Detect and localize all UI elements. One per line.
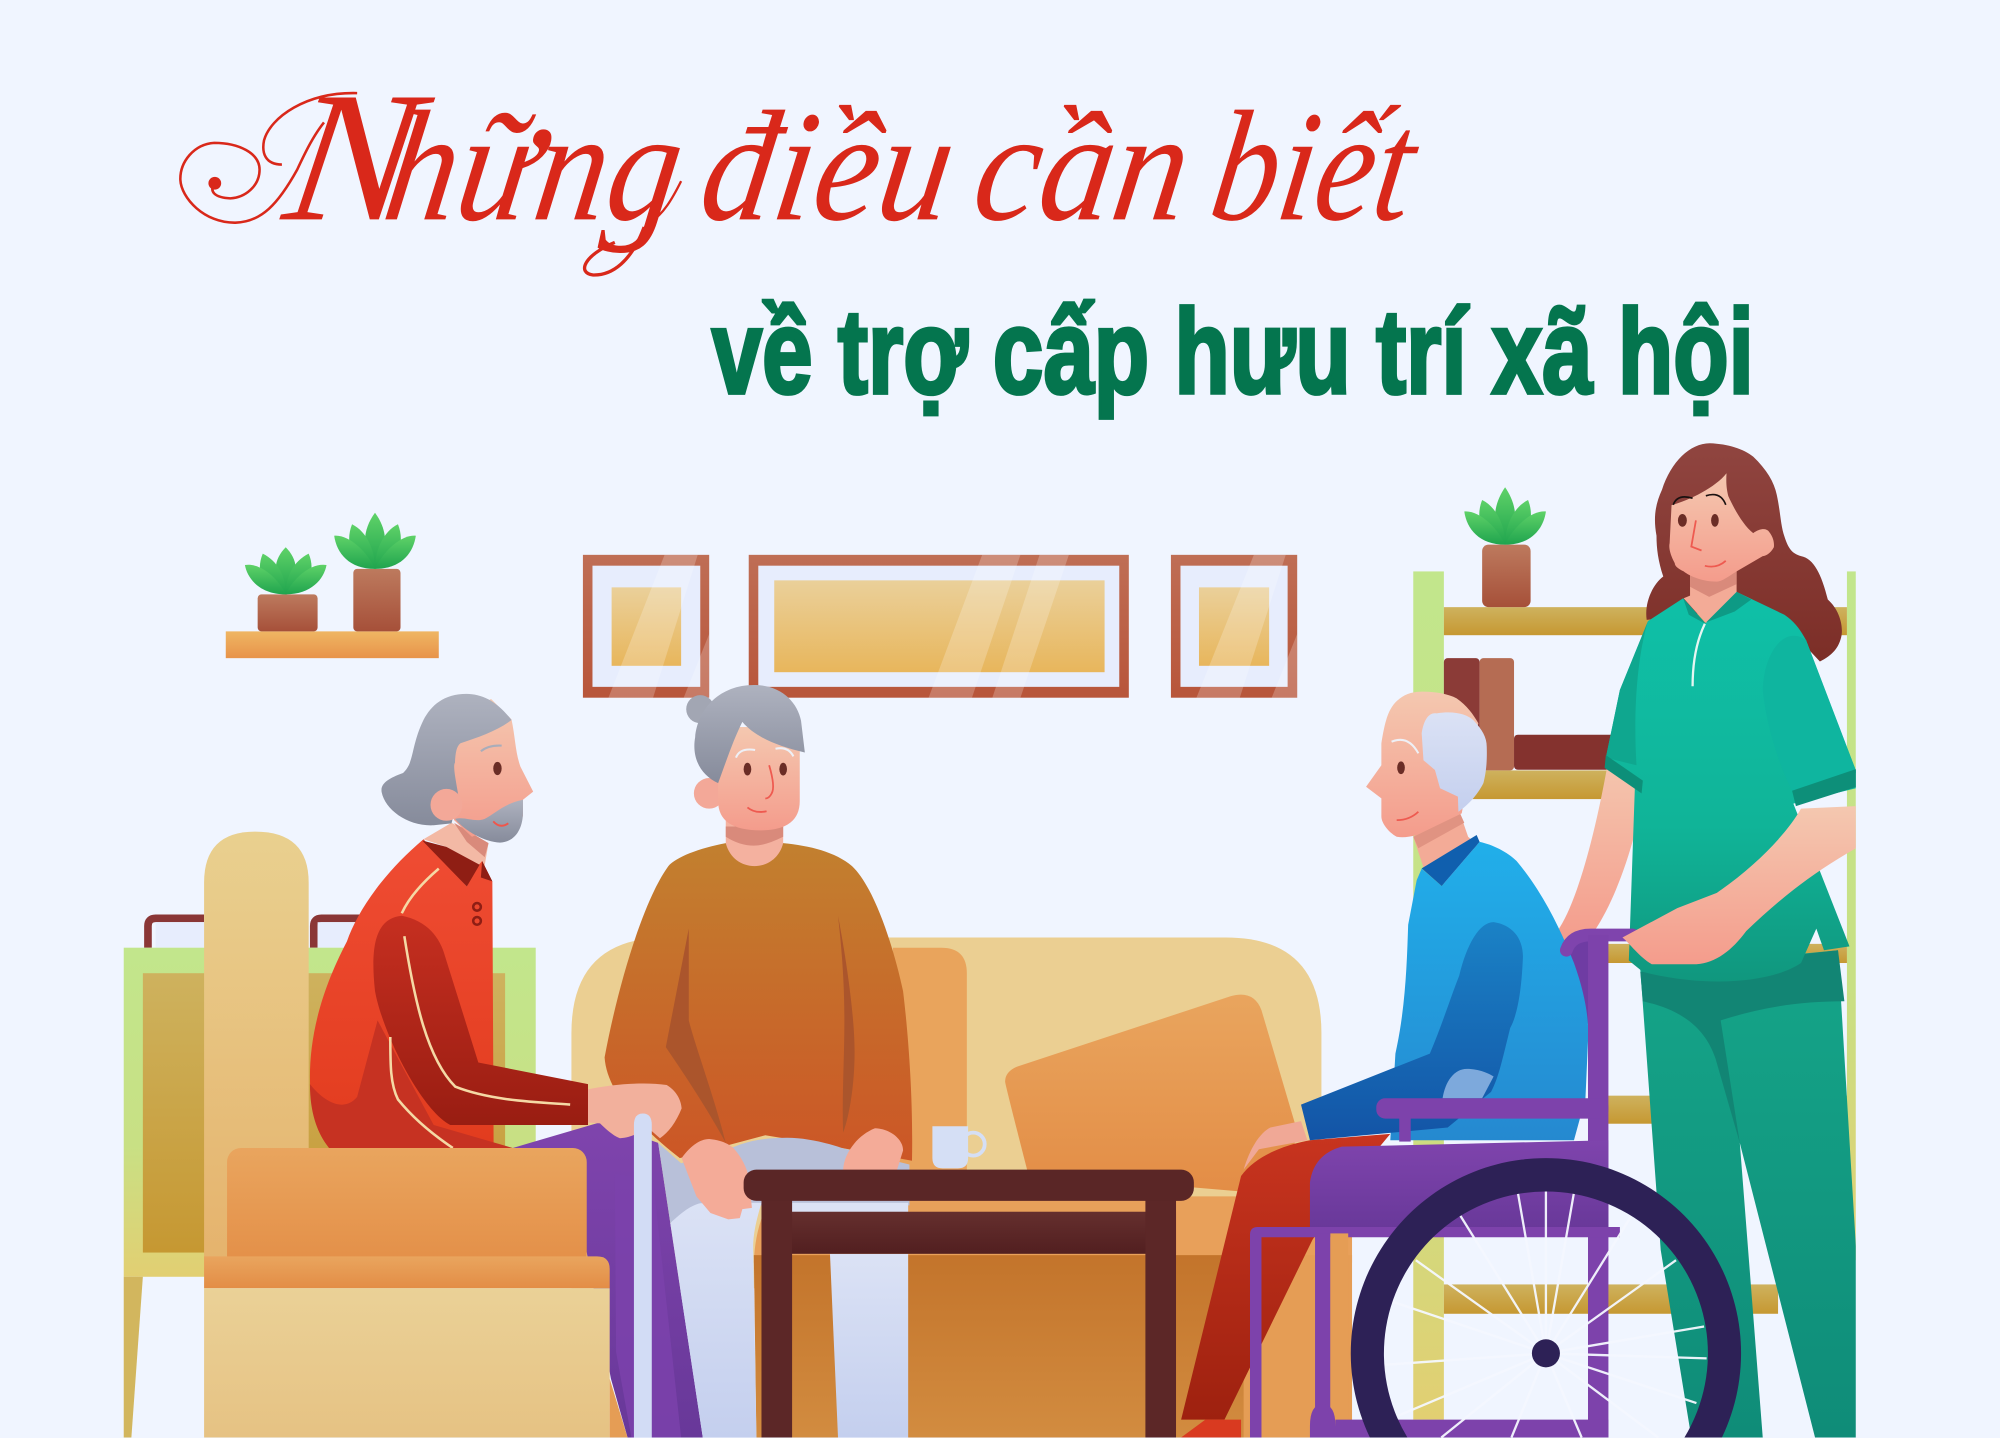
sweater bbox=[1390, 842, 1588, 1140]
eye bbox=[1397, 761, 1405, 774]
hair bbox=[1422, 712, 1487, 812]
face bbox=[718, 727, 800, 830]
eyes bbox=[1678, 514, 1687, 527]
top frames bbox=[148, 918, 360, 948]
brows bbox=[1673, 495, 1726, 505]
piping bbox=[390, 869, 570, 1148]
front roll bbox=[204, 1256, 610, 1288]
neck shadow bbox=[1690, 568, 1737, 597]
buttons bbox=[473, 903, 481, 925]
left leg bbox=[670, 1203, 761, 1437]
brows bbox=[736, 748, 793, 758]
man's hand on cane bbox=[588, 1083, 682, 1138]
cabinet body bbox=[124, 948, 536, 1277]
elbow patch bbox=[1443, 1069, 1494, 1098]
bun bbox=[686, 695, 714, 723]
purple trouser highlight bbox=[615, 1173, 681, 1437]
pot right bbox=[353, 569, 401, 631]
arm bbox=[1301, 922, 1523, 1140]
collar bbox=[422, 841, 492, 886]
title text: điều bbox=[691, 79, 966, 254]
left cabinet bbox=[124, 918, 536, 1437]
tunic bbox=[1606, 592, 1856, 981]
neck bbox=[1413, 813, 1480, 867]
picture frame right bbox=[1171, 555, 1297, 698]
footrest rail bbox=[1310, 1404, 1608, 1437]
sofa seat bbox=[754, 1196, 1352, 1263]
sweater bbox=[605, 843, 912, 1161]
mouth bbox=[747, 807, 767, 812]
man in wheelchair bbox=[1181, 692, 1588, 1437]
left arm bbox=[1557, 753, 1645, 944]
face bbox=[1669, 473, 1774, 582]
frame rails bbox=[1250, 1227, 1620, 1437]
right bookcase bbox=[1413, 487, 1856, 1420]
plant on shelf bbox=[1464, 487, 1546, 545]
picture frame left bbox=[583, 555, 709, 698]
face bbox=[440, 699, 533, 837]
neck bbox=[1684, 568, 1737, 623]
shelves bbox=[1444, 607, 1847, 635]
brow bbox=[1392, 740, 1418, 753]
wheelchair bbox=[1250, 935, 1741, 1437]
hair bbox=[381, 694, 511, 825]
shelf board bbox=[226, 631, 439, 658]
nurse body bbox=[1557, 443, 1856, 1437]
wheelchair backrest bbox=[1564, 935, 1591, 1033]
armchair base bbox=[204, 1288, 610, 1437]
purple trousers bbox=[513, 1122, 703, 1437]
trousers bbox=[1640, 950, 1856, 1437]
push handle bbox=[1566, 935, 1633, 950]
title text: biết bbox=[1201, 79, 1430, 254]
armchair back bbox=[204, 832, 309, 1276]
decorative swash of the capital N bbox=[180, 93, 681, 275]
sleeve shade right bbox=[1763, 636, 1856, 791]
pot on shelf bbox=[1482, 545, 1531, 607]
folds bbox=[666, 929, 726, 1143]
right hand bbox=[843, 1128, 903, 1171]
beard bbox=[455, 800, 523, 843]
smile bbox=[493, 821, 508, 826]
tunic zip bbox=[1693, 624, 1705, 686]
sofa pillow bbox=[1005, 995, 1295, 1191]
eye bbox=[493, 762, 502, 775]
table top bbox=[744, 1170, 1194, 1201]
collar bbox=[1422, 835, 1480, 886]
picture frame centre bbox=[749, 555, 1129, 698]
wheel hub bbox=[1532, 1339, 1560, 1367]
sofa bbox=[571, 937, 1352, 1437]
title text: cần bbox=[964, 79, 1202, 254]
coffee cup bbox=[932, 1126, 985, 1168]
neck bbox=[726, 816, 783, 866]
ear bbox=[694, 778, 724, 809]
sleeve bbox=[373, 916, 588, 1125]
right cuff bbox=[1792, 769, 1856, 806]
books bbox=[1444, 658, 1480, 728]
hair bbox=[694, 685, 805, 783]
armchair seat bbox=[204, 1148, 628, 1437]
sofa back bbox=[571, 937, 1321, 1288]
man with beard bbox=[310, 694, 703, 1437]
left hand bbox=[682, 1139, 752, 1219]
title text: hững bbox=[375, 79, 695, 254]
wheel ring bbox=[1351, 1158, 1741, 1437]
sofa base bbox=[754, 1255, 1256, 1437]
seat cushion bbox=[227, 1148, 587, 1276]
smile bbox=[1397, 812, 1418, 820]
title text: N bbox=[272, 53, 442, 260]
pot left bbox=[258, 594, 318, 631]
walking cane bbox=[634, 1114, 652, 1437]
seat bbox=[1310, 1140, 1608, 1231]
chin shadow bbox=[726, 827, 783, 846]
hair bbox=[1646, 443, 1842, 661]
nose bbox=[765, 765, 773, 798]
spokes bbox=[1385, 1190, 1707, 1437]
shirt lower shade bbox=[310, 1020, 513, 1148]
shirt bbox=[310, 839, 513, 1148]
right leg bbox=[830, 1254, 908, 1437]
trouser shade bbox=[1640, 950, 1844, 1143]
neck shadow bbox=[1413, 813, 1464, 848]
eyes bbox=[744, 763, 751, 776]
wall shelf with plants bbox=[226, 513, 439, 658]
coffee table bbox=[744, 1170, 1194, 1437]
ear bbox=[430, 789, 462, 821]
cabinet leg bbox=[124, 1277, 143, 1437]
woman with bun bbox=[605, 685, 912, 1437]
armrest bbox=[1376, 1098, 1608, 1119]
mouth bbox=[1705, 561, 1726, 567]
lap bbox=[658, 1138, 909, 1227]
red trousers bbox=[1181, 1134, 1390, 1420]
head bbox=[1366, 692, 1478, 837]
table shelf bar bbox=[765, 1212, 1176, 1254]
left cuff bbox=[1605, 755, 1643, 793]
nose bbox=[1691, 520, 1702, 551]
backrest post bbox=[1588, 935, 1608, 1437]
title: script heading bbox=[180, 53, 1434, 275]
nurse right arm and hand bbox=[1622, 806, 1856, 964]
tunic collar bbox=[1683, 592, 1751, 623]
strip under table top bbox=[761, 1203, 908, 1213]
brow bbox=[481, 746, 502, 751]
posts bbox=[1413, 571, 1444, 1420]
sleeve shade left bbox=[1606, 621, 1648, 765]
plant right bbox=[334, 513, 416, 569]
plant left bbox=[245, 547, 327, 594]
shoe bbox=[1181, 1420, 1241, 1437]
table legs bbox=[761, 1199, 792, 1437]
sofa arm cushion bbox=[892, 948, 967, 1170]
illustration scene bbox=[124, 443, 1856, 1437]
hand bbox=[1244, 1121, 1307, 1170]
neck bbox=[424, 822, 488, 866]
